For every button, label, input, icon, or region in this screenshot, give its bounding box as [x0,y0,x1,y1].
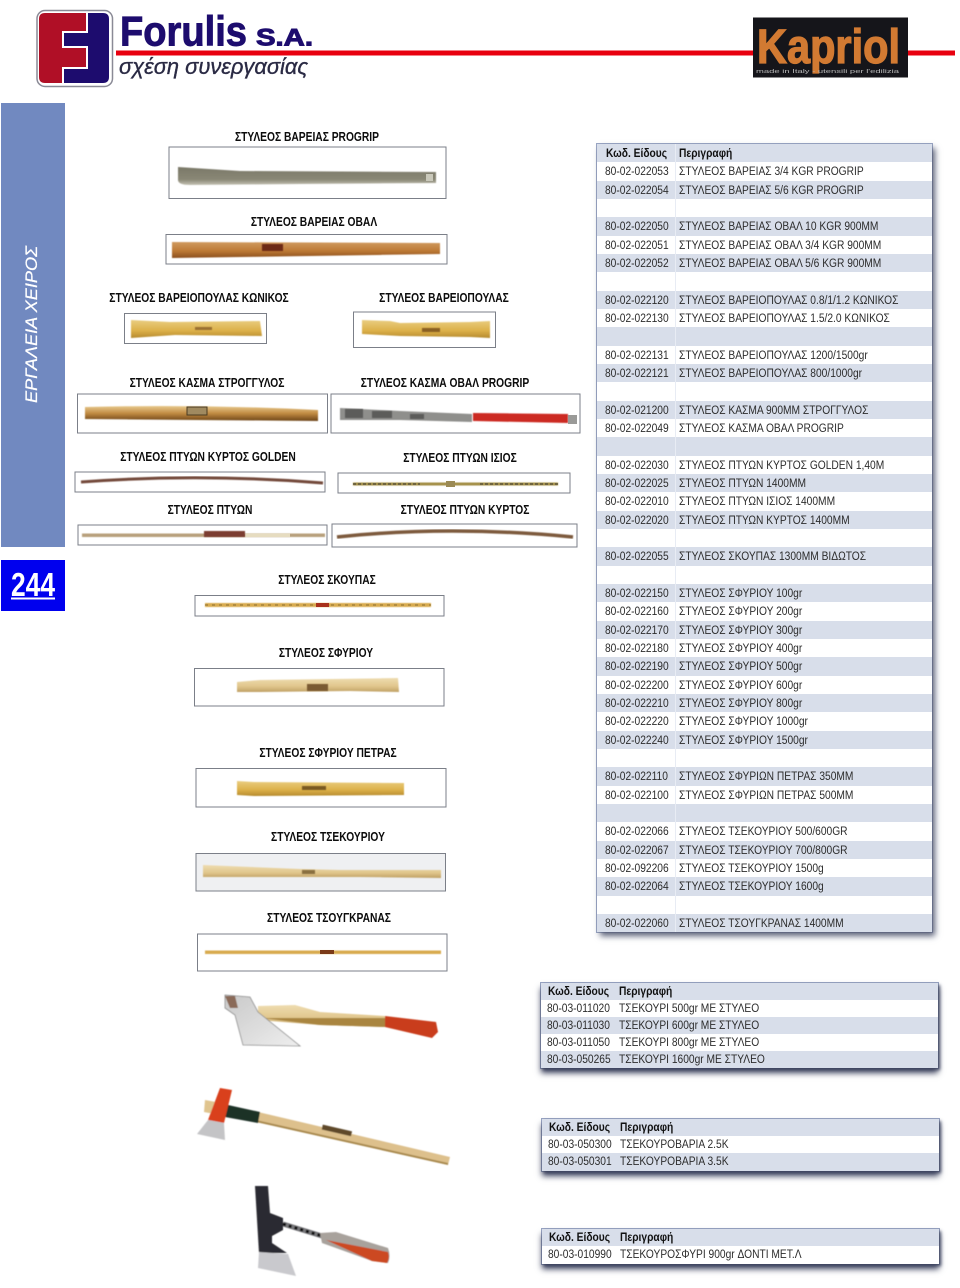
table: handles price codes: 80-02-022025 [605,476,669,490]
table: handles price codes: 80-02-022054 [605,183,669,197]
label: mattock-hoe handle: ΣΤΥΛΕΟΣ ΤΣΟΥΓΚΡΑΝΑΣ [267,911,391,925]
header row [542,1119,939,1136]
table: handles price codes: 80-02-022240 [605,733,669,747]
table: splitting mauls: 80-03-050301 [548,1154,612,1168]
table: handles price codes: ΣΤΥΛΕΟΣ ΣΦΥΡΙΟΥ 100gr [679,586,802,600]
photo frame: broom handle [195,596,444,616]
logo: Forulis emblem [37,10,112,86]
table: handles price codes: ΣΤΥΛΕΟΣ ΣΦΥΡΙΟΥ 1000gr [679,714,808,728]
table: axes: 80-03-050265 [547,1052,611,1066]
table: handles price codes: ΣΤΥΛΕΟΣ ΒΑΡΕΙΟΠΟΥΛΑΣ 1.5/2.0 ΚΩΝΙΚΟΣ [679,311,890,325]
photo frame: golden curved pickaxe handle [75,472,325,492]
photo frame: axe handle [196,854,446,891]
table: axes: ΤΣΕΚΟΥΡΙ 500gr ΜΕ ΣΤΥΛΕΟ [619,1001,759,1015]
sidebar title: ΕΡΓΑΛΕΙΑ ΧΕΙΡΟΣ [22,245,41,403]
table: handles price codes: 80-02-022055 [605,549,669,563]
logo: S.A.: S.A. [256,24,313,52]
header row [541,983,938,1000]
logo: slogan: σχέση συνεργασίας [119,54,308,79]
label: oval sledge handle: ΣΤΥΛΕΟΣ ΒΑΡΕΙΑΣ ΟΒΑΛ [251,215,377,229]
photo frame: pickaxe handle [78,525,327,545]
photo frame: stone hammer handle [196,768,446,807]
table: axes: ΤΣΕΚΟΥΡΙ 600gr ΜΕ ΣΤΥΛΕΟ [619,1018,759,1032]
table: handles price codes [597,144,932,932]
table: handles price codes: 80-02-022210 [605,696,669,710]
photo frame: conical small sledge handle [124,314,266,344]
table: handles price codes: 80-02-022020 [605,513,669,527]
table: handles price codes: ΣΤΥΛΕΟΣ ΣΦΥΡΙΟΥ 300gr [679,623,802,637]
label: broom handle: ΣΤΥΛΕΟΣ ΣΚΟΥΠΑΣ [278,573,376,587]
photo frame: progrip sledge handle [169,147,446,198]
table: handles price codes: ΣΤΥΛΕΟΣ ΒΑΡΕΙΟΠΟΥΛΑΣ 800/1000gr [679,366,862,380]
table: axes: ΤΣΕΚΟΥΡΙ 1600gr ΜΕ ΣΤΥΛΕΟ [619,1052,765,1066]
photo: axe with red grip [225,995,438,1046]
label: pickaxe handle: ΣΤΥΛΕΟΣ ΠΤΥΩΝ [168,503,252,517]
logo: Kapriol: Kapriol [757,21,900,74]
logo: Forulis wordmark: Forulis [120,8,247,54]
label: hammer handle: ΣΤΥΛΕΟΣ ΣΦΥΡΙΟΥ [279,646,373,660]
table: handles price codes: 80-02-022049 [605,421,669,435]
table: handles price codes: ΣΤΥΛΕΟΣ ΤΣΕΚΟΥΡΙΟΥ 500/600GR [679,824,848,838]
table: handles price codes: ΣΤΥΛΕΟΣ ΒΑΡΕΙΑΣ ΟΒΑΛ 3/4 KGR 900ΜΜ [679,238,881,252]
label: small sledge handle: ΣΤΥΛΕΟΣ ΒΑΡΕΙΟΠΟΥΛΑΣ [379,291,509,305]
header red rule [116,50,955,56]
header row: Κωδ. Είδους [549,1230,610,1244]
table: handles price codes: ΣΤΥΛΕΟΣ ΣΦΥΡΙΟΥ 800gr [679,696,802,710]
table: handles price codes: 80-02-022110 [605,769,668,783]
table: handles price codes: 80-02-092206 [605,861,669,875]
table: handles price codes: 80-02-022066 [605,824,669,838]
table: handles price codes: 80-02-022190 [605,659,669,673]
photo: splitting maul [197,1088,450,1165]
table: handles price codes: ΣΤΥΛΕΟΣ ΤΣΕΚΟΥΡΙΟΥ 1500g [679,861,824,875]
photo frame: curved pickaxe handle [332,524,577,547]
table: axes: 80-03-011030 [547,1018,610,1032]
table: handles price codes: ΣΤΥΛΕΟΣ ΠΤΥΩΝ ΚΥΡΤΟΣ 1400ΜΜ [679,513,850,527]
photo: hatchet hammer [255,1186,390,1276]
table: handles price codes: ΣΤΥΛΕΟΣ ΒΑΡΕΙΑΣ 3/4 KGR PROGRIP [679,164,864,178]
photo frame: oval sledge handle [166,234,447,264]
header row: Περιγραφή [619,984,672,998]
header row: Περιγραφή [620,1230,673,1244]
table: axes [541,983,938,1068]
table: handles price codes: ΣΤΥΛΕΟΣ ΣΦΥΡΙΩΝ ΠΕΤΡΑΣ 500ΜΜ [679,788,853,802]
table: handles price codes: ΣΤΥΛΕΟΣ ΣΦΥΡΙΩΝ ΠΕΤΡΑΣ 350ΜΜ [679,769,853,783]
table: axes: ΤΣΕΚΟΥΡΙ 800gr ΜΕ ΣΤΥΛΕΟ [619,1035,759,1049]
table: handles price codes: 80-02-022050 [605,219,669,233]
table: axes: 80-03-011050 [547,1035,610,1049]
table: axes: 80-03-011020 [547,1001,610,1015]
photo frame: progrip mattock handle [331,394,580,433]
table: handles price codes: 80-02-022180 [605,641,669,655]
label: progrip mattock handle: ΣΤΥΛΕΟΣ ΚΑΣΜΑ ΟΒΑΛ PROGRIP [361,376,529,390]
label: round mattock handle: ΣΤΥΛΕΟΣ ΚΑΣΜΑ ΣΤΡΟΓΓΥΛΟΣ [130,376,284,390]
table: handles price codes: ΣΤΥΛΕΟΣ ΤΣΟΥΓΚΡΑΝΑΣ 1400ΜΜ [679,916,844,930]
label: golden pickaxe handle: ΣΤΥΛΕΟΣ ΠΤΥΩΝ ΚΥΡΤΟΣ GOLDEN [120,450,296,464]
table: handles price codes: ΣΤΥΛΕΟΣ ΠΤΥΩΝ ΚΥΡΤΟΣ GOLDEN 1,40Μ [679,458,884,472]
label: curved pickaxe handle: ΣΤΥΛΕΟΣ ΠΤΥΩΝ ΚΥΡΤΟΣ [401,503,529,517]
table: handles price codes: 80-02-022130 [605,311,669,325]
table: handles price codes: ΣΤΥΛΕΟΣ ΒΑΡΕΙΑΣ 5/6 KGR PROGRIP [679,183,864,197]
table: handles price codes: ΣΤΥΛΕΟΣ ΤΣΕΚΟΥΡΙΟΥ 1600g [679,879,824,893]
table: handles price codes: 80-02-022120 [605,293,669,307]
table: handles price codes: ΣΤΥΛΕΟΣ ΤΣΕΚΟΥΡΙΟΥ 700/800GR [679,843,848,857]
table: handles price codes: 80-02-022200 [605,678,669,692]
table: handles price codes: 80-02-022060 [605,916,669,930]
table: handles price codes: ΣΤΥΛΕΟΣ ΚΑΣΜΑ ΟΒΑΛ PROGRIP [679,421,844,435]
label: axe handle: ΣΤΥΛΕΟΣ ΤΣΕΚΟΥΡΙΟΥ [271,830,385,844]
table: handles price codes: 80-02-022100 [605,788,669,802]
table: handles price codes: 80-02-022131 [605,348,669,362]
header row: Κωδ. Είδους [606,146,667,160]
header row: Περιγραφή [679,146,732,160]
table: handles price codes: 80-02-022170 [605,623,669,637]
label: straight pickaxe handle: ΣΤΥΛΕΟΣ ΠΤΥΩΝ ΙΣΙΟΣ [403,451,517,465]
table: splitting mauls: ΤΣΕΚΟΥΡΟΒΑΡΙΑ 3.5Κ [620,1154,729,1168]
label: progrip sledge handle: ΣΤΥΛΕΟΣ ΒΑΡΕΙΑΣ PROGRIP [235,130,379,144]
header row: Περιγραφή [620,1120,673,1134]
photo frame: round mattock handle [78,394,328,433]
page number badge: 244 [11,566,56,603]
photo frame: straight pickaxe handle [338,473,570,493]
table: handles price codes: ΣΤΥΛΕΟΣ ΒΑΡΕΙΟΠΟΥΛΑΣ 0.8/1/1.2 ΚΩΝΙΚΟΣ [679,293,898,307]
table: handles price codes: 80-02-022030 [605,458,669,472]
table: handles price codes: 80-02-022051 [605,238,669,252]
photo frame: hammer handle [194,668,444,706]
table: handles price codes: 80-02-022064 [605,879,669,893]
header row: Κωδ. Είδους [548,984,609,998]
photo frame: small sledge handle [354,312,496,348]
table: handles price codes: 80-02-022150 [605,586,669,600]
table: handles price codes: 80-02-021200 [605,403,669,417]
table: handles price codes: ΣΤΥΛΕΟΣ ΠΤΥΩΝ 1400ΜΜ [679,476,806,490]
label: conical small sledge handle: ΣΤΥΛΕΟΣ ΒΑΡΕΙΟΠΟΥΛΑΣ ΚΩΝΙΚΟΣ [109,291,289,305]
table: handles price codes: ΣΤΥΛΕΟΣ ΒΑΡΕΙΟΠΟΥΛΑΣ 1200/1500gr [679,348,868,362]
table: handles price codes: 80-02-022220 [605,714,669,728]
table: splitting mauls: 80-03-050300 [548,1137,612,1151]
logo: Kapriol: made in Italy - utensili per l'edilizia [756,69,901,75]
table: hatchet hammer [542,1229,939,1264]
table: handles price codes: ΣΤΥΛΕΟΣ ΣΦΥΡΙΟΥ 400gr [679,641,802,655]
header row [542,1229,939,1246]
table: splitting mauls [542,1119,939,1171]
table: handles price codes: ΣΤΥΛΕΟΣ ΒΑΡΕΙΑΣ ΟΒΑΛ 10 KGR 900ΜΜ [679,219,878,233]
table: handles price codes: ΣΤΥΛΕΟΣ ΣΦΥΡΙΟΥ 600gr [679,678,802,692]
table: handles price codes: ΣΤΥΛΕΟΣ ΠΤΥΩΝ ΙΣΙΟΣ 1400ΜΜ [679,494,835,508]
header row [597,144,932,162]
sidebar panel [1,103,65,547]
table: handles price codes: ΣΤΥΛΕΟΣ ΣΦΥΡΙΟΥ 1500gr [679,733,808,747]
table: splitting mauls: ΤΣΕΚΟΥΡΟΒΑΡΙΑ 2.5Κ [620,1137,729,1151]
photo frame: mattock-hoe handle [198,934,447,971]
table: hatchet hammer: 80-03-010990 [548,1247,612,1261]
table: handles price codes: 80-02-022121 [605,366,669,380]
table: handles price codes: 80-02-022010 [605,494,669,508]
table: handles price codes: ΣΤΥΛΕΟΣ ΣΦΥΡΙΟΥ 500gr [679,659,802,673]
table: handles price codes: 80-02-022053 [605,164,669,178]
label: stone hammer handle: ΣΤΥΛΕΟΣ ΣΦΥΡΙΟΥ ΠΕΤΡΑΣ [259,746,397,760]
table: handles price codes: ΣΤΥΛΕΟΣ ΚΑΣΜΑ 900ΜΜ ΣΤΡΟΓΓΥΛΟΣ [679,403,868,417]
table: handles price codes: 80-02-022160 [605,604,669,618]
table: handles price codes: ΣΤΥΛΕΟΣ ΣΚΟΥΠΑΣ 1300ΜΜ ΒΙΔΩΤΟΣ [679,549,866,563]
table: handles price codes: ΣΤΥΛΕΟΣ ΣΦΥΡΙΟΥ 200gr [679,604,802,618]
table: handles price codes: 80-02-022067 [605,843,669,857]
page number badge [1,560,65,611]
header row: Κωδ. Είδους [549,1120,610,1134]
table: handles price codes: ΣΤΥΛΕΟΣ ΒΑΡΕΙΑΣ ΟΒΑΛ 5/6 KGR 900ΜΜ [679,256,881,270]
table: handles price codes: 80-02-022052 [605,256,669,270]
table: hatchet hammer: ΤΣΕΚΟΥΡΟΣΦΥΡΙ 900gr ΔΟΝΤΙ ΜΕΤ.Λ [620,1247,802,1261]
